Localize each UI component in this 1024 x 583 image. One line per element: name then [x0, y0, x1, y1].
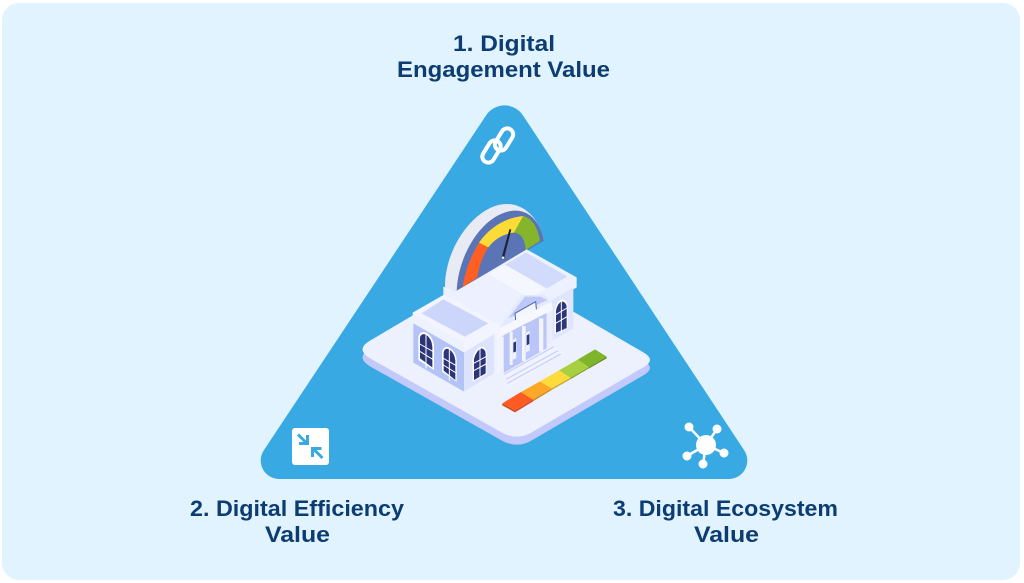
heading: 3. Digital Ecosystem Value — [613, 496, 838, 547]
steps — [503, 347, 563, 387]
main roof — [443, 249, 577, 337]
left wing windows — [418, 332, 487, 382]
right wall and window — [547, 287, 573, 344]
heading: 2. Digital Efficiency Value: Value — [265, 522, 330, 547]
heading: 2. Digital Efficiency Value — [190, 496, 405, 547]
heading: 1. Digital Engagement Value: 1. Digital — [453, 31, 555, 56]
isometric bank illustration — [362, 204, 650, 445]
platform — [362, 268, 650, 445]
left wing — [413, 295, 497, 392]
heading: 1. Digital Engagement Value: Engagement Value — [397, 57, 610, 82]
icon: network hub — [682, 422, 728, 468]
heading: 2. Digital Efficiency Value: 2. Digital Efficiency — [190, 496, 405, 521]
gauge — [445, 204, 544, 291]
icon: compress arrows — [292, 428, 329, 465]
heading: 3. Digital Ecosystem Value: Value — [694, 522, 759, 547]
icon: chain link — [480, 126, 515, 165]
heading: 1. Digital Engagement Value — [397, 31, 610, 82]
heading: 3. Digital Ecosystem Value: 3. Digital Ecosystem — [613, 496, 838, 521]
portico with columns and sign — [497, 295, 553, 374]
color rating bar — [502, 349, 607, 412]
blue rounded triangle — [261, 105, 747, 479]
